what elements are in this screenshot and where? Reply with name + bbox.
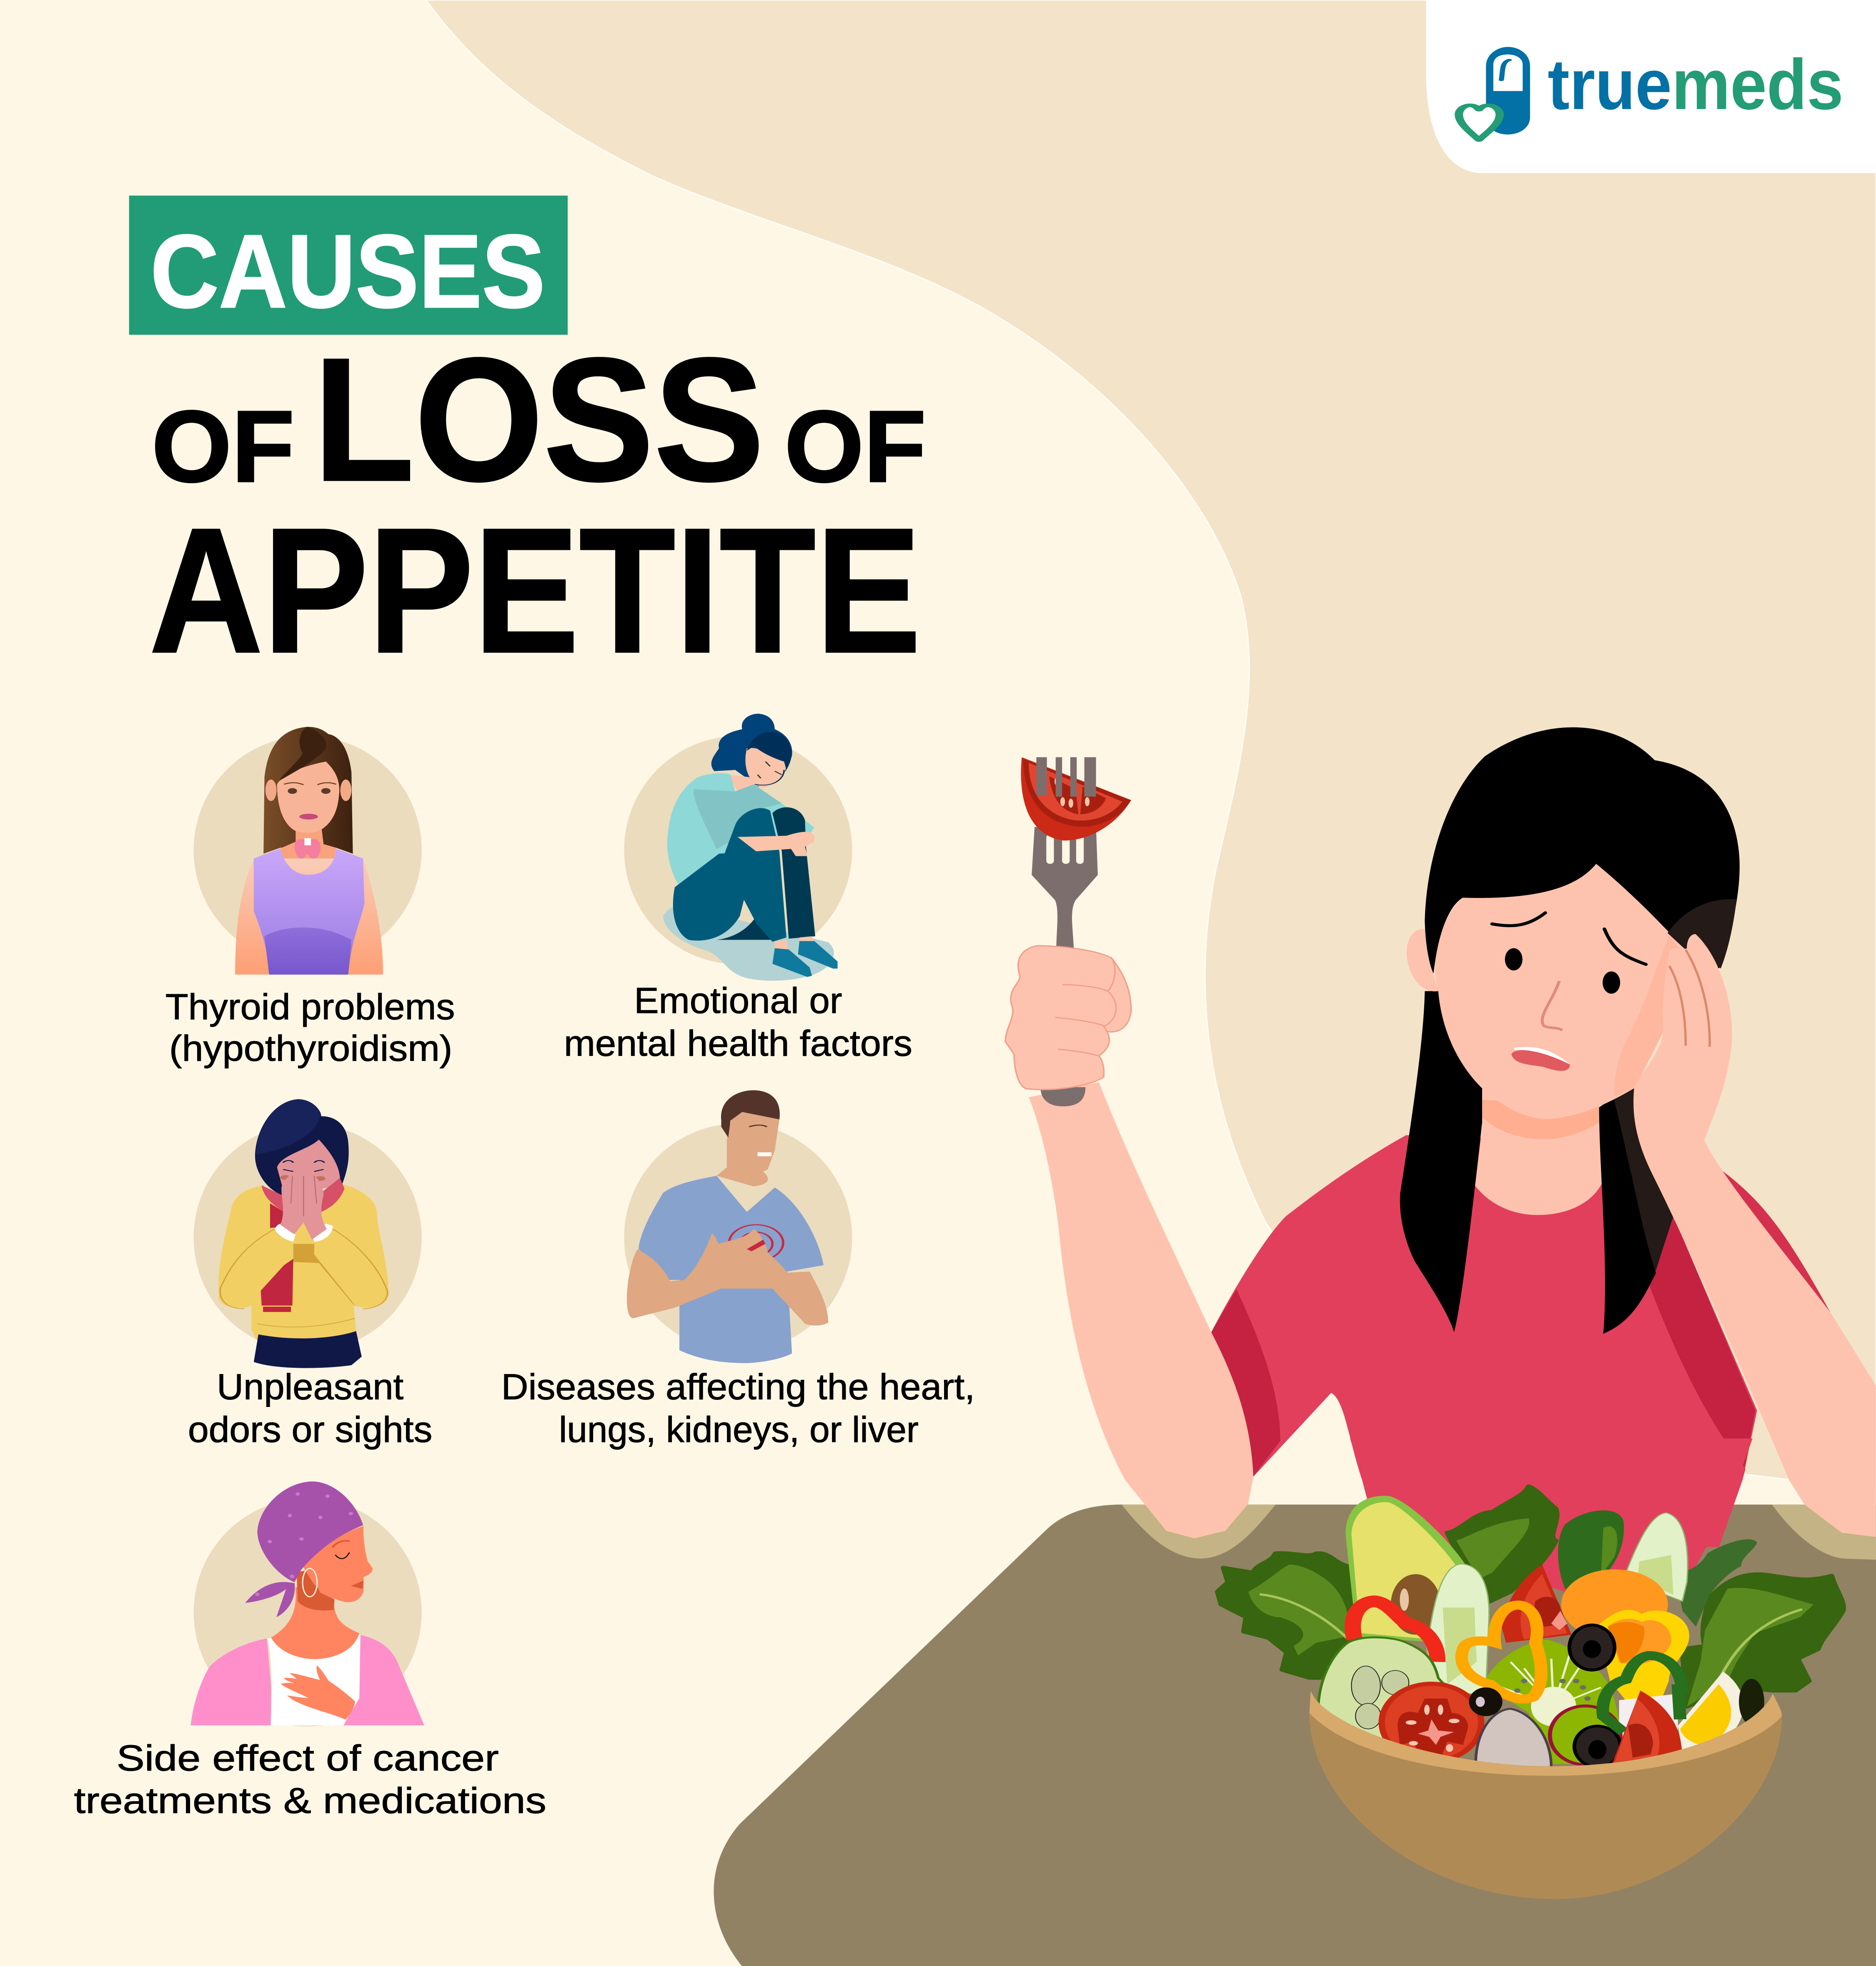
arm shadows on table bbox=[1122, 1505, 1876, 1560]
shirt behind salad bbox=[1350, 1439, 1753, 1592]
red pepper ring bbox=[1353, 1601, 1438, 1662]
circle backdrop bbox=[624, 1123, 852, 1352]
shirt bbox=[1211, 1135, 1830, 1547]
hair left strand bbox=[1400, 991, 1482, 1332]
circle backdrop bbox=[194, 1123, 422, 1352]
eyes bbox=[1505, 948, 1620, 994]
black olive top bbox=[1568, 1624, 1616, 1671]
caption: Side effect of cancer bbox=[117, 1738, 499, 1778]
cause: emotional or mental health bbox=[564, 714, 912, 1063]
caption: Diseases affecting the heart, bbox=[501, 1367, 975, 1407]
tomato wedge back bbox=[1502, 1565, 1572, 1643]
circle backdrop bbox=[194, 1498, 422, 1727]
caption: (hypothyroidism) bbox=[169, 1028, 452, 1068]
fork bbox=[1032, 827, 1098, 1106]
orange pepper ring bbox=[1462, 1605, 1541, 1699]
cause: unpleasant odors or sights bbox=[188, 1099, 432, 1450]
hair top bbox=[1425, 727, 1740, 973]
tomato wedge front bbox=[1612, 1690, 1681, 1763]
left arm bbox=[1029, 1082, 1253, 1538]
cause: cancer treatment side effects bbox=[74, 1482, 546, 1821]
icon: woman with thyroid bbox=[235, 727, 383, 975]
bowl rim bbox=[1310, 1690, 1782, 1899]
icon: woman with headscarf bbox=[191, 1482, 424, 1725]
cheek shadow bbox=[1614, 935, 1679, 1097]
eyebrows bbox=[1492, 913, 1646, 964]
small olive bbox=[1469, 1688, 1503, 1716]
orange slice and yellow pepper bbox=[1561, 1570, 1689, 1703]
caption bbox=[188, 1367, 432, 1450]
tomato slice bbox=[1379, 1682, 1484, 1763]
table bbox=[714, 1505, 1876, 1966]
title block bbox=[129, 196, 926, 690]
caption: odors or sights bbox=[188, 1409, 432, 1450]
black olive front bbox=[1573, 1725, 1622, 1768]
white mushroom bits bbox=[1619, 1694, 1678, 1764]
circle backdrop bbox=[624, 736, 852, 964]
back cucumber bbox=[1623, 1513, 1688, 1601]
right arm and hand on cheek bbox=[1633, 934, 1876, 1537]
tan background blob bbox=[426, 0, 1876, 1490]
icon: sad seated woman bbox=[663, 714, 838, 981]
causes banner bbox=[129, 196, 568, 335]
hair right strand bbox=[1599, 1087, 1673, 1334]
logo icon: capsule and heart bbox=[1459, 47, 1530, 140]
mushroom bbox=[1476, 1709, 1551, 1767]
icon: woman covering face bbox=[218, 1099, 389, 1368]
caption bbox=[74, 1738, 546, 1821]
caption: Emotional or bbox=[634, 980, 842, 1021]
circle backdrop bbox=[194, 736, 422, 964]
caption: treatments & medications bbox=[74, 1780, 546, 1821]
long cucumber bbox=[1427, 1564, 1489, 1694]
caption: Unpleasant bbox=[217, 1367, 403, 1407]
neck bbox=[1475, 1087, 1603, 1215]
caption bbox=[165, 987, 455, 1068]
icon: man holding chest bbox=[627, 1090, 828, 1363]
cucumber slice bbox=[1318, 1637, 1444, 1745]
heading OF second: OF bbox=[784, 389, 926, 503]
causes heading: CAUSES bbox=[150, 213, 545, 329]
fork tine gaps bbox=[1046, 835, 1084, 864]
logo panel bbox=[1426, 0, 1876, 173]
heading APPETITE: APPETITE bbox=[149, 491, 921, 690]
bowl body bbox=[1310, 1713, 1782, 1899]
caption: mental health factors bbox=[564, 1023, 912, 1063]
cause: thyroid problems bbox=[165, 727, 455, 1068]
egg bbox=[1678, 1671, 1764, 1751]
avocado bbox=[1345, 1496, 1465, 1643]
mouth bbox=[1511, 1047, 1570, 1071]
heading LOSS: LOSS bbox=[313, 322, 764, 518]
cause: diseases of organs bbox=[501, 1090, 975, 1450]
fist bbox=[1005, 945, 1131, 1090]
ear bbox=[1407, 929, 1438, 991]
logo background bbox=[1426, 0, 1876, 173]
nose bbox=[1542, 981, 1562, 1030]
logo wordmark: truemeds bbox=[1548, 45, 1843, 125]
red onion ring bbox=[1550, 1706, 1621, 1765]
main woman illustration bbox=[1005, 727, 1876, 1547]
back lettuce leaves bbox=[1217, 1486, 1843, 1707]
caption bbox=[564, 980, 912, 1063]
green pepper ring bbox=[1603, 1655, 1683, 1732]
kiwi slice bbox=[1483, 1640, 1619, 1764]
face bbox=[1435, 864, 1684, 1119]
caption bbox=[501, 1367, 975, 1450]
tomato on fork bbox=[1021, 757, 1131, 840]
hair shade bbox=[1668, 899, 1736, 968]
salad bowl illustration bbox=[1217, 1439, 1843, 1899]
caption: lungs, kidneys, or liver bbox=[559, 1409, 919, 1450]
heading OF: OF bbox=[152, 389, 295, 503]
caption: Thyroid problems bbox=[165, 987, 455, 1027]
